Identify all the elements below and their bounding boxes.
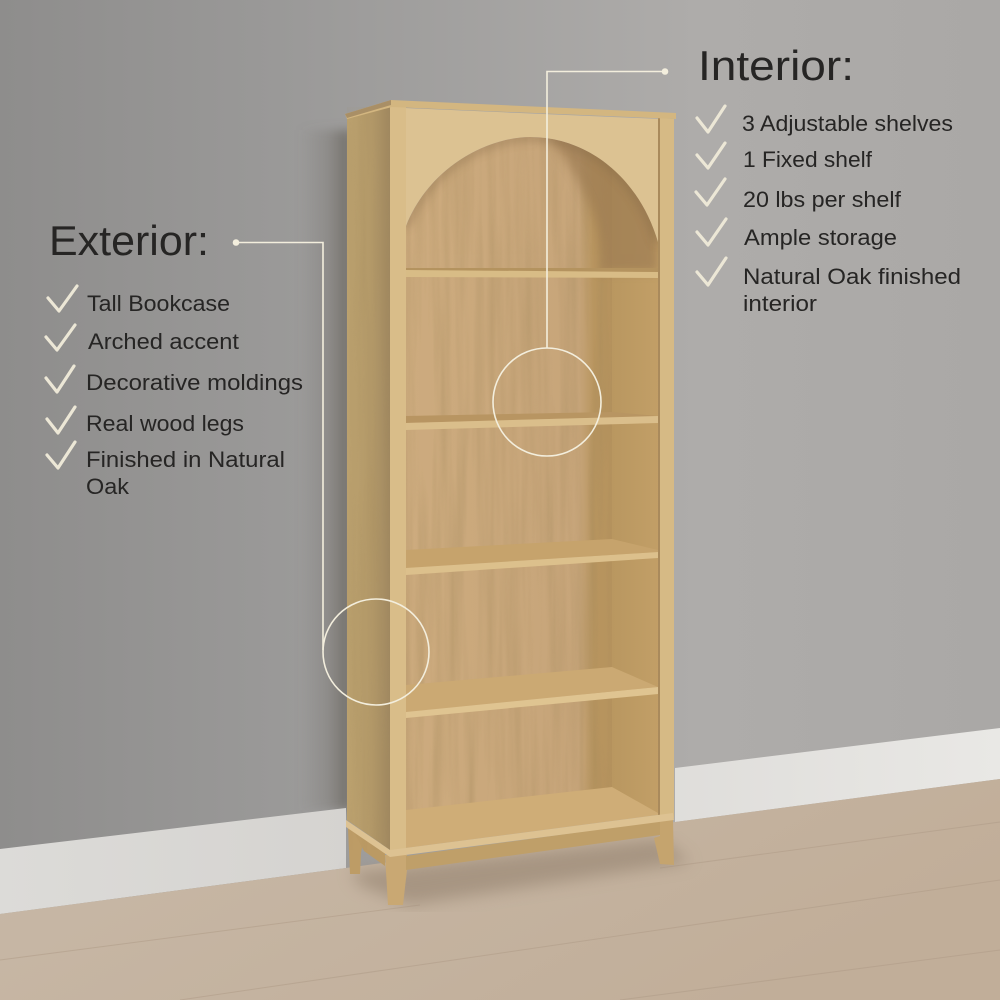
base moulding xyxy=(346,813,674,857)
feature labels: Real wood legs xyxy=(86,411,244,436)
feature labels: Decorative moldings xyxy=(86,370,303,395)
heading: exterior: Exterior: xyxy=(49,217,209,264)
feature labels: Oak xyxy=(86,474,130,499)
checks xyxy=(696,106,726,285)
arched header xyxy=(405,108,660,242)
front-left leg xyxy=(385,855,407,905)
feature labels: Finished in Natural xyxy=(86,447,285,472)
bookcase xyxy=(345,100,676,905)
feature labels: 1 Fixed shelf xyxy=(743,147,873,172)
bookcase shadow on wall xyxy=(300,130,352,810)
checks xyxy=(46,286,77,468)
feature labels xyxy=(742,111,961,316)
shelf 2 xyxy=(406,412,658,430)
back-left leg xyxy=(348,828,364,874)
right leg xyxy=(654,820,674,865)
side panel xyxy=(347,107,390,850)
feature labels: Tall Bookcase xyxy=(87,291,230,316)
right front stile xyxy=(660,118,674,820)
front apron xyxy=(406,821,660,870)
shelf 4 xyxy=(406,667,658,718)
exterior checklist xyxy=(46,286,303,499)
baseboard xyxy=(0,728,1000,914)
heading: interior: Interior: xyxy=(698,42,854,89)
floor shadow xyxy=(350,838,690,905)
left front stile xyxy=(390,106,406,855)
feature labels xyxy=(86,291,303,499)
side apron xyxy=(353,830,385,866)
callout: exterior leader xyxy=(234,240,429,705)
callout: interior leader xyxy=(493,69,668,456)
back panel and interior xyxy=(406,130,660,830)
feature labels: 20 lbs per shelf xyxy=(743,187,902,212)
feature labels: Arched accent xyxy=(88,329,239,354)
feature labels: 3 Adjustable shelves xyxy=(742,111,953,136)
top cap xyxy=(345,100,676,119)
bottom shelf xyxy=(406,787,658,848)
shelf 1 xyxy=(406,268,658,278)
feature labels: Natural Oak finished xyxy=(743,264,961,289)
interior checklist xyxy=(696,106,961,316)
floor xyxy=(0,779,1000,1000)
feature labels: Ample storage xyxy=(744,225,897,250)
feature labels: interior xyxy=(743,291,817,316)
shelf 3 xyxy=(406,539,658,575)
